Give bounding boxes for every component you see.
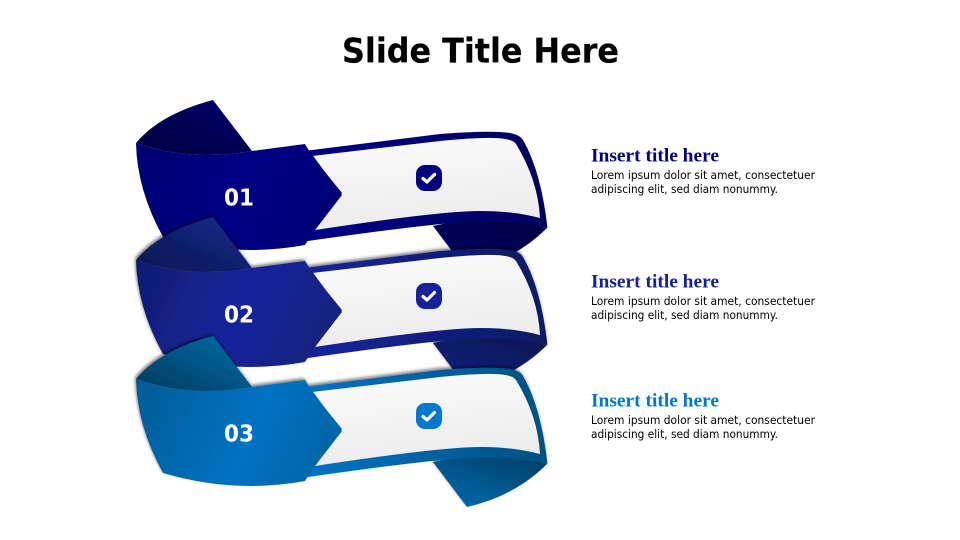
icon: check badge 2 — [416, 283, 442, 309]
ribbon 2 outlined white band — [304, 249, 548, 360]
ribbon 2 number: 02 — [224, 302, 254, 328]
title: Slide Title Here — [342, 32, 619, 72]
ribbon 1 back-left flap — [136, 100, 252, 155]
text block 2: Lorem ipsum dolor sit amet, consectetuer — [591, 294, 815, 308]
icon: check badge 3 — [416, 403, 442, 429]
ribbon 3 outlined white band — [304, 368, 548, 479]
ribbon 3 number: 03 — [224, 422, 254, 448]
text block 1: adipiscing elit, sed diam nonummy. — [591, 182, 778, 196]
text block 1 — [591, 146, 815, 196]
ribbon 3 back-right flap — [433, 455, 547, 507]
text block 1: Lorem ipsum dolor sit amet, consectetuer — [591, 168, 815, 182]
ribbon 3 back-left flap — [136, 336, 252, 391]
ribbon 2 back-left flap — [136, 217, 252, 272]
icon: check badge 1 — [416, 165, 442, 191]
ribbon 1 band panel — [312, 138, 540, 230]
text block 3 — [591, 390, 815, 441]
text block 1: Insert title here — [591, 146, 719, 166]
ribbon 1 number tab — [136, 143, 342, 250]
ribbon 3 number tab — [136, 379, 342, 486]
text block 3: adipiscing elit, sed diam nonummy. — [591, 427, 778, 441]
text block 3: Insert title here — [591, 390, 719, 412]
ribbon 1 back-right flap — [433, 219, 547, 271]
ribbon 2 number tab — [136, 260, 342, 367]
ribbon 2 band panel — [312, 255, 540, 347]
ribbon 1 outlined white band — [304, 132, 548, 243]
ribbon 1 number: 01 — [224, 186, 254, 212]
text block 2 — [591, 272, 815, 322]
ribbon 3 band panel — [312, 374, 540, 466]
ribbon 2 back-right flap — [433, 336, 547, 388]
ribbon 3 — [136, 336, 548, 507]
text block 3: Lorem ipsum dolor sit amet, consectetuer — [591, 413, 815, 427]
text block 2: adipiscing elit, sed diam nonummy. — [591, 308, 778, 322]
ribbon 1 — [136, 100, 548, 271]
text block 2: Insert title here — [591, 272, 719, 292]
ribbon 2 — [136, 217, 548, 388]
